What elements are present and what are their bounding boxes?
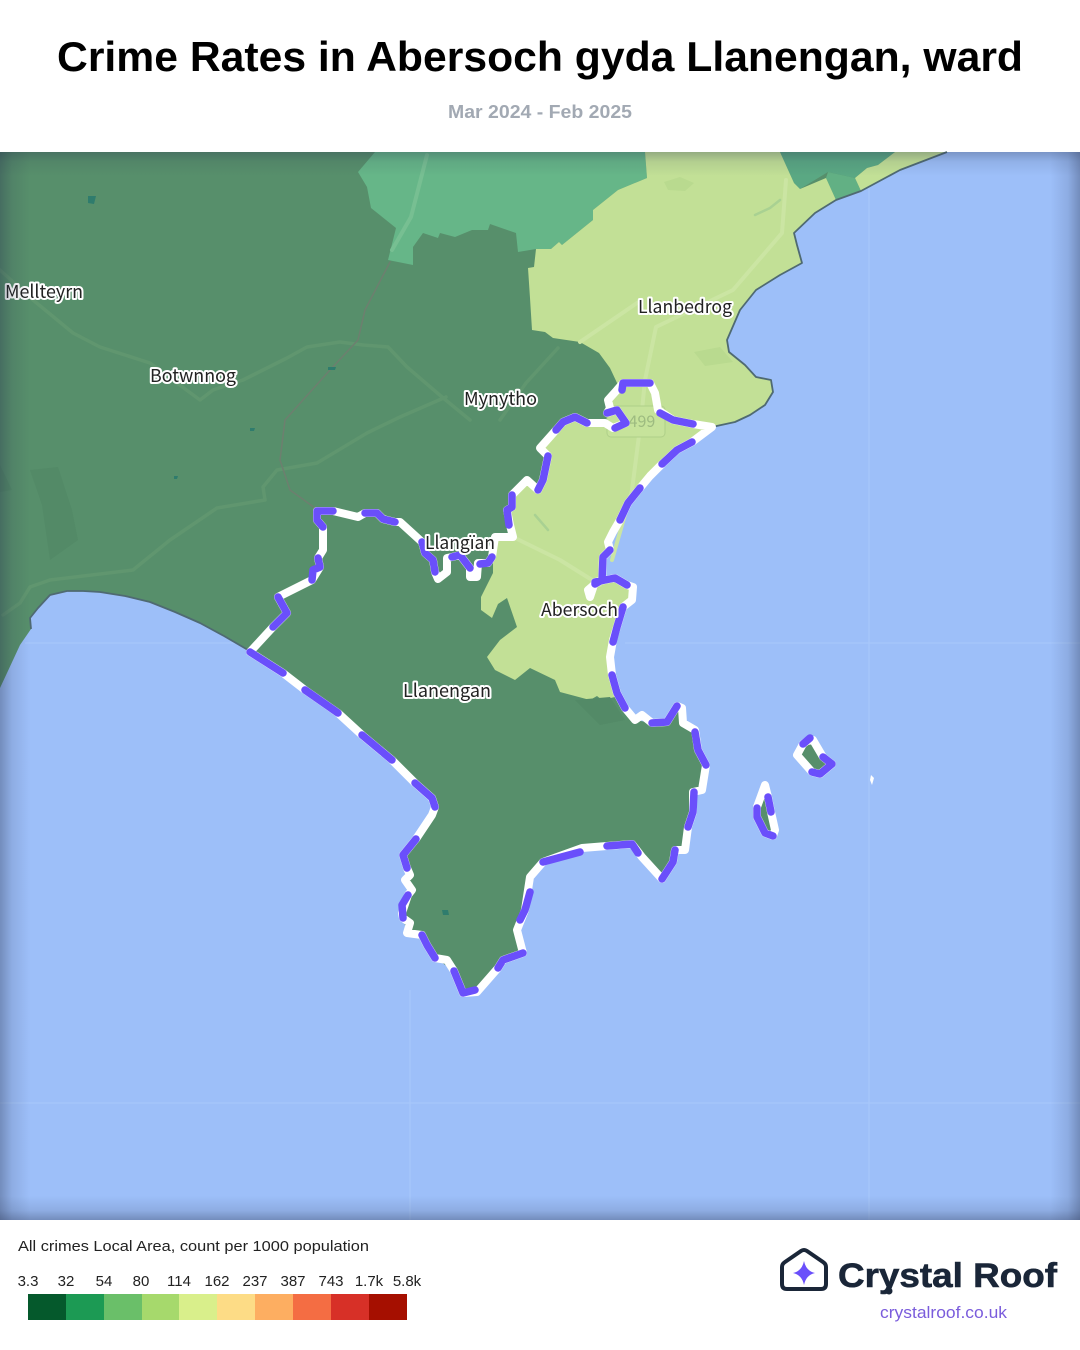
legend scale values [18, 1273, 422, 1290]
legend scale values: 237 [242, 1273, 268, 1290]
legend scale values: 54 [96, 1273, 112, 1290]
roads and terrain details [0, 155, 786, 915]
place label: Llanengan: Llanengan [403, 677, 491, 703]
road shield: A499 [607, 406, 665, 437]
island: south [757, 785, 775, 836]
ward boundary: white base line [250, 383, 832, 993]
choropleth map [0, 152, 1080, 1220]
island: east [797, 738, 832, 774]
legend scale values: 80 [133, 1273, 149, 1290]
title: Crime Rates in Abersoch gyda Llanengan, ward [57, 33, 1023, 80]
place label: Mynytho: Mynytho [464, 385, 537, 411]
legend scale values: 743 [318, 1273, 344, 1290]
place label: Llangïan: Llangïan [425, 529, 495, 555]
brand url: crystalroof.co.uk [880, 1304, 1008, 1322]
place label: Mellteyrn: Mellteyrn [5, 278, 83, 304]
legend scale values: 162 [204, 1273, 230, 1290]
place label: Abersoch: Abersoch [541, 596, 618, 622]
legend scale values: 5.8k [393, 1273, 422, 1290]
map edge vignette [0, 152, 1080, 1220]
area: Llanbedrog and Abersoch light green [481, 152, 836, 700]
area: north-east coastal mid-green [826, 172, 861, 200]
place label: Botwnnog: Botwnnog [150, 362, 236, 388]
road shield: A499: 499 [629, 408, 655, 432]
legend scale values: 32 [58, 1273, 74, 1290]
area: north-east mid-green [780, 152, 895, 189]
legend colour bar [28, 1294, 407, 1320]
land: dark green low-crime areas [0, 152, 947, 993]
legend title: All crimes Local Area, count per 1000 population [18, 1238, 369, 1255]
icon: Crystal Roof house logo [782, 1250, 826, 1289]
island speck [870, 775, 874, 785]
legend scale values: 114 [167, 1273, 191, 1290]
area: north mid-green [358, 152, 647, 265]
subtitle: date range: Mar 2024 - Feb 2025 [448, 101, 632, 122]
place label: Llanbedrog: Llanbedrog [638, 293, 732, 319]
coastline [30, 152, 947, 650]
legend scale values: 1.7k [355, 1273, 384, 1290]
ward boundary: purple dashes [250, 383, 832, 993]
area: north-east coastal light strip [855, 152, 947, 191]
legend scale values: 3.3 [18, 1273, 38, 1290]
brand name: Crystal Roof [838, 1257, 1058, 1295]
legend scale values: 387 [280, 1273, 306, 1290]
